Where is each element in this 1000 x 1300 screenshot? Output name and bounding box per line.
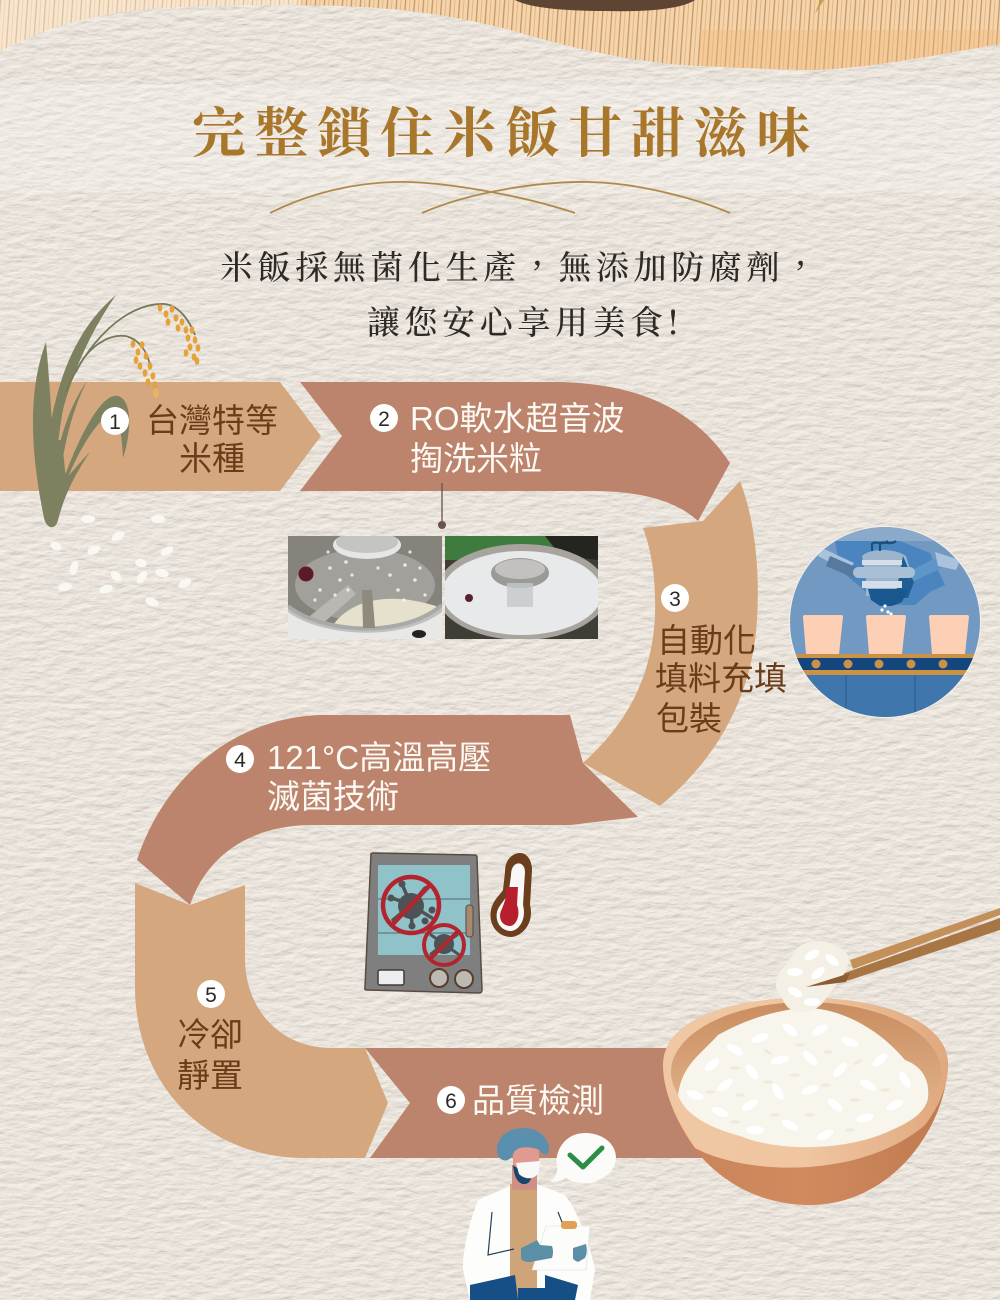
virus 1 (383, 877, 439, 933)
cups (803, 615, 843, 654)
robot arms (818, 549, 854, 566)
conveyor (790, 654, 980, 675)
rice on chopsticks (776, 941, 849, 1012)
step 5 number and label: 冷卻 (177, 1016, 243, 1053)
step 6 arrow (365, 1048, 720, 1158)
mask (516, 1161, 540, 1178)
step 2 number and label: RO軟水超音波 (410, 400, 624, 437)
step 2 number and label: 掏洗米粒 (410, 440, 542, 477)
subtitle (220, 242, 822, 344)
step 3 number and label (655, 584, 787, 737)
step 5 arrow (135, 883, 388, 1158)
step 2 number and label (370, 400, 624, 477)
illustration: inspector with clipboard (463, 1128, 595, 1300)
step 4 number and label: 4 (234, 749, 246, 772)
step 5 number and label: 靜置 (177, 1057, 243, 1094)
step 3 arrow (583, 481, 758, 806)
step 3 number and label: 填料充填 (655, 660, 787, 697)
step 4 number and label: 滅菌技術 (267, 778, 399, 815)
step 3 number and label: 3 (669, 588, 681, 611)
step 6 number and label: 品質檢測 (472, 1082, 604, 1119)
step 1 number and label: 1 (109, 411, 121, 434)
icon: sterilizer with crossed viruses (365, 853, 482, 993)
rice grains (49, 515, 193, 609)
coat lines (488, 1212, 562, 1255)
gloves (521, 1240, 553, 1262)
icon: thermometer (490, 853, 532, 937)
step 3 number and label: 自動化 (657, 622, 756, 659)
step 4 number and label (226, 739, 491, 815)
virus 2 (424, 925, 464, 965)
subtitle: 米飯採無菌化生產，無添加防腐劑， (220, 242, 822, 289)
connector line with dot (438, 483, 446, 529)
step 3 number and label: 包裝 (656, 700, 722, 737)
photo: ultrasonic rice wash left (288, 531, 442, 642)
step 2 arrow (300, 382, 730, 521)
step 2 number and label: 2 (378, 408, 390, 431)
step 1 arrow (0, 382, 321, 491)
decorative arcs (270, 182, 730, 213)
icon: speech bubble with check (550, 1133, 616, 1183)
rice mound (678, 1008, 928, 1147)
icon: rice plant (33, 295, 200, 527)
step 5 number and label: 5 (205, 984, 217, 1007)
step 5 number and label (177, 980, 243, 1094)
illustration: bowl of rice with chopsticks (663, 908, 1000, 1205)
step 6 number and label: 6 (445, 1090, 457, 1113)
step 1 number and label: 台灣特等 (146, 402, 278, 439)
machine base (806, 675, 964, 717)
clipboard (532, 1226, 590, 1270)
title: 完整鎖住米飯甘甜滋味 (192, 91, 819, 168)
step 1 number and label: 米種 (179, 440, 245, 477)
neck and face (512, 1165, 537, 1190)
icon: automated filling machine (789, 526, 981, 718)
hair cap (497, 1128, 549, 1160)
step 4 number and label: 121°C高溫高壓 (267, 739, 491, 776)
subtitle: 讓您安心享用美食! (367, 297, 683, 344)
bamboo mat background (0, 0, 1000, 110)
step 4 arrow (137, 715, 638, 905)
machine head (862, 550, 914, 596)
chopsticks (850, 908, 1000, 969)
step 1 number and label (101, 402, 278, 477)
title band (0, 85, 1000, 193)
coat (463, 1184, 595, 1300)
photo: ultrasonic rice wash right (445, 536, 598, 639)
